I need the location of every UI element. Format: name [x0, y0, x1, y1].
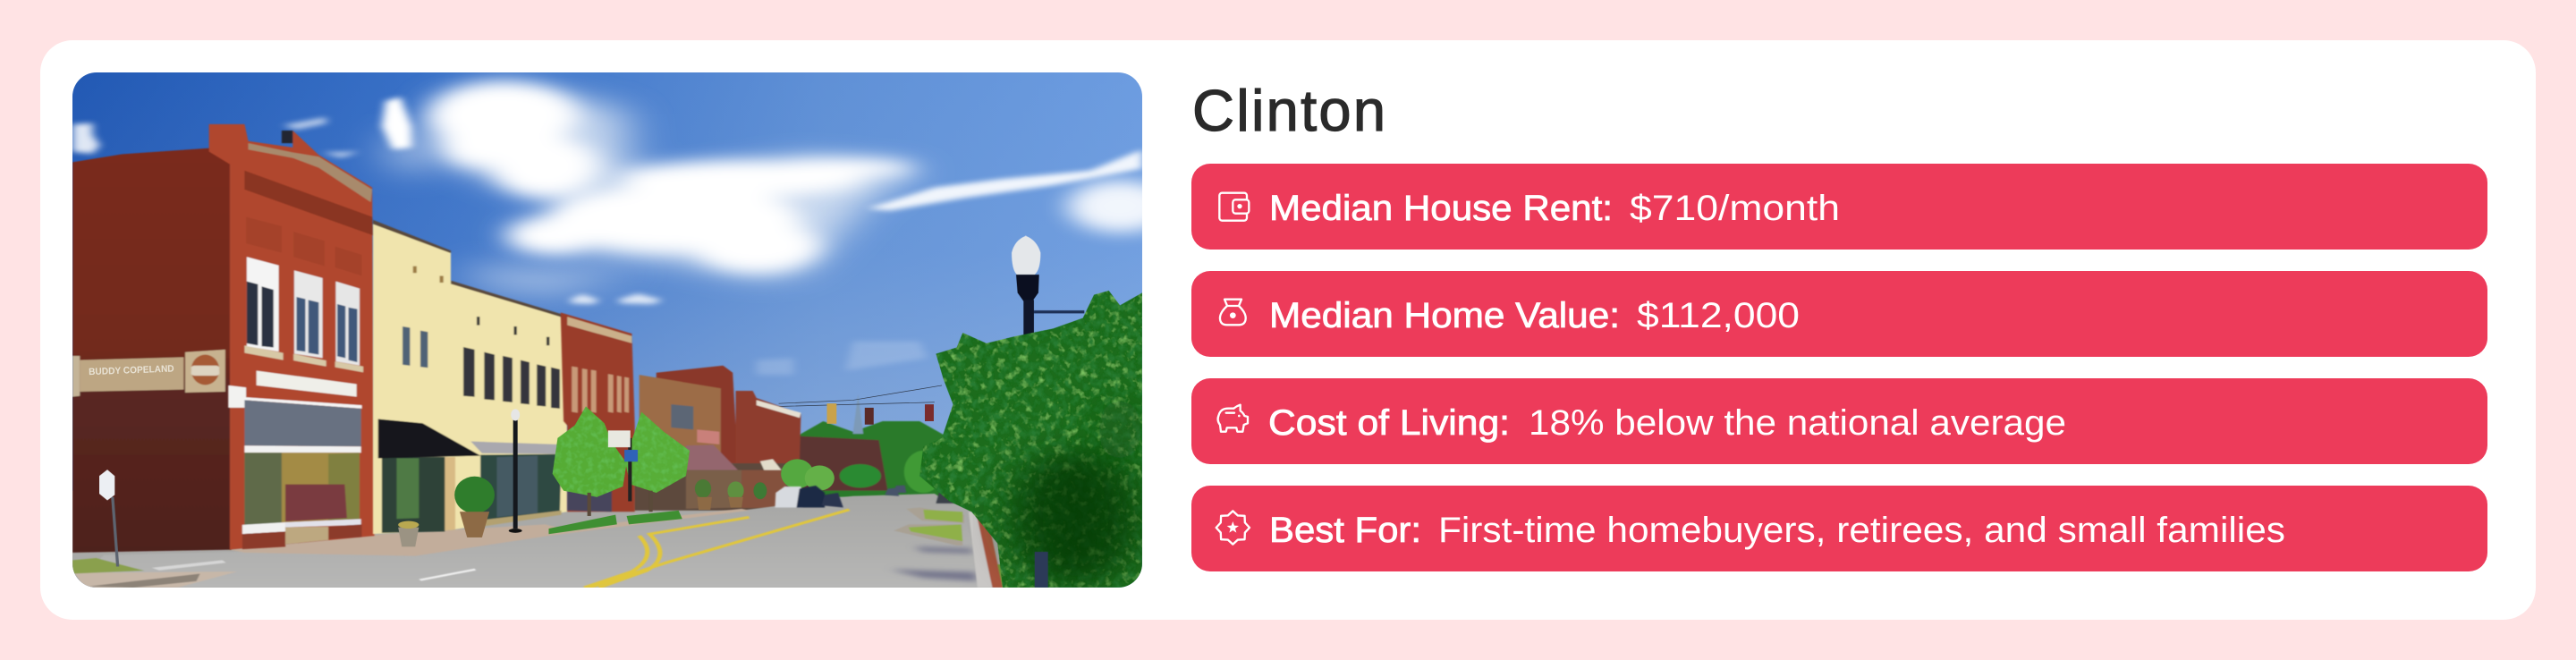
distant trees and town — [797, 393, 957, 497]
row: median house rent — [1191, 164, 2487, 250]
label: cost of living: Cost of Living: — [1268, 403, 1510, 443]
value: rent: $710/month — [1630, 189, 1840, 228]
label: best for: Best For: — [1269, 511, 1421, 550]
street trees and planters — [398, 406, 835, 546]
row: cost of living — [1191, 378, 2487, 464]
road — [72, 494, 1038, 588]
value: cost of living: 18% below the national average — [1529, 403, 2066, 443]
hardware sign lettering: BUDDY COPELAND — [89, 364, 174, 377]
photo: small-town main street — [72, 72, 1142, 588]
large green tree on the right — [919, 291, 1142, 588]
sky — [72, 72, 1142, 588]
yellow centre lines — [584, 510, 849, 588]
label: median house rent: Median House Rent: — [1269, 189, 1613, 228]
title: Clinton — [1192, 78, 1385, 143]
clouds — [72, 83, 1172, 375]
icon: wallet — [1219, 193, 1249, 221]
red building — [561, 312, 635, 512]
cream buildings — [373, 220, 567, 534]
corner building front wall — [209, 124, 375, 550]
icon: star badge — [1216, 511, 1250, 545]
overhead wires and traffic signals — [779, 385, 942, 425]
label: median home value: Median Home Value: — [1269, 296, 1620, 335]
parked cars — [775, 486, 961, 508]
row: median home value — [1191, 271, 2487, 357]
far red and tan buildings — [634, 366, 801, 511]
icon: money bag — [1220, 300, 1246, 325]
stop sign — [99, 470, 119, 566]
value: home value: $112,000 — [1637, 296, 1800, 335]
value: best for: First-time homebuyers, retirees, and small families — [1438, 511, 2285, 550]
ground behind street — [72, 491, 1037, 588]
icon: piggy bank — [1218, 405, 1248, 432]
row: best for — [1191, 486, 2487, 571]
street lamp — [1012, 236, 1084, 338]
corner building side wall — [72, 148, 231, 553]
